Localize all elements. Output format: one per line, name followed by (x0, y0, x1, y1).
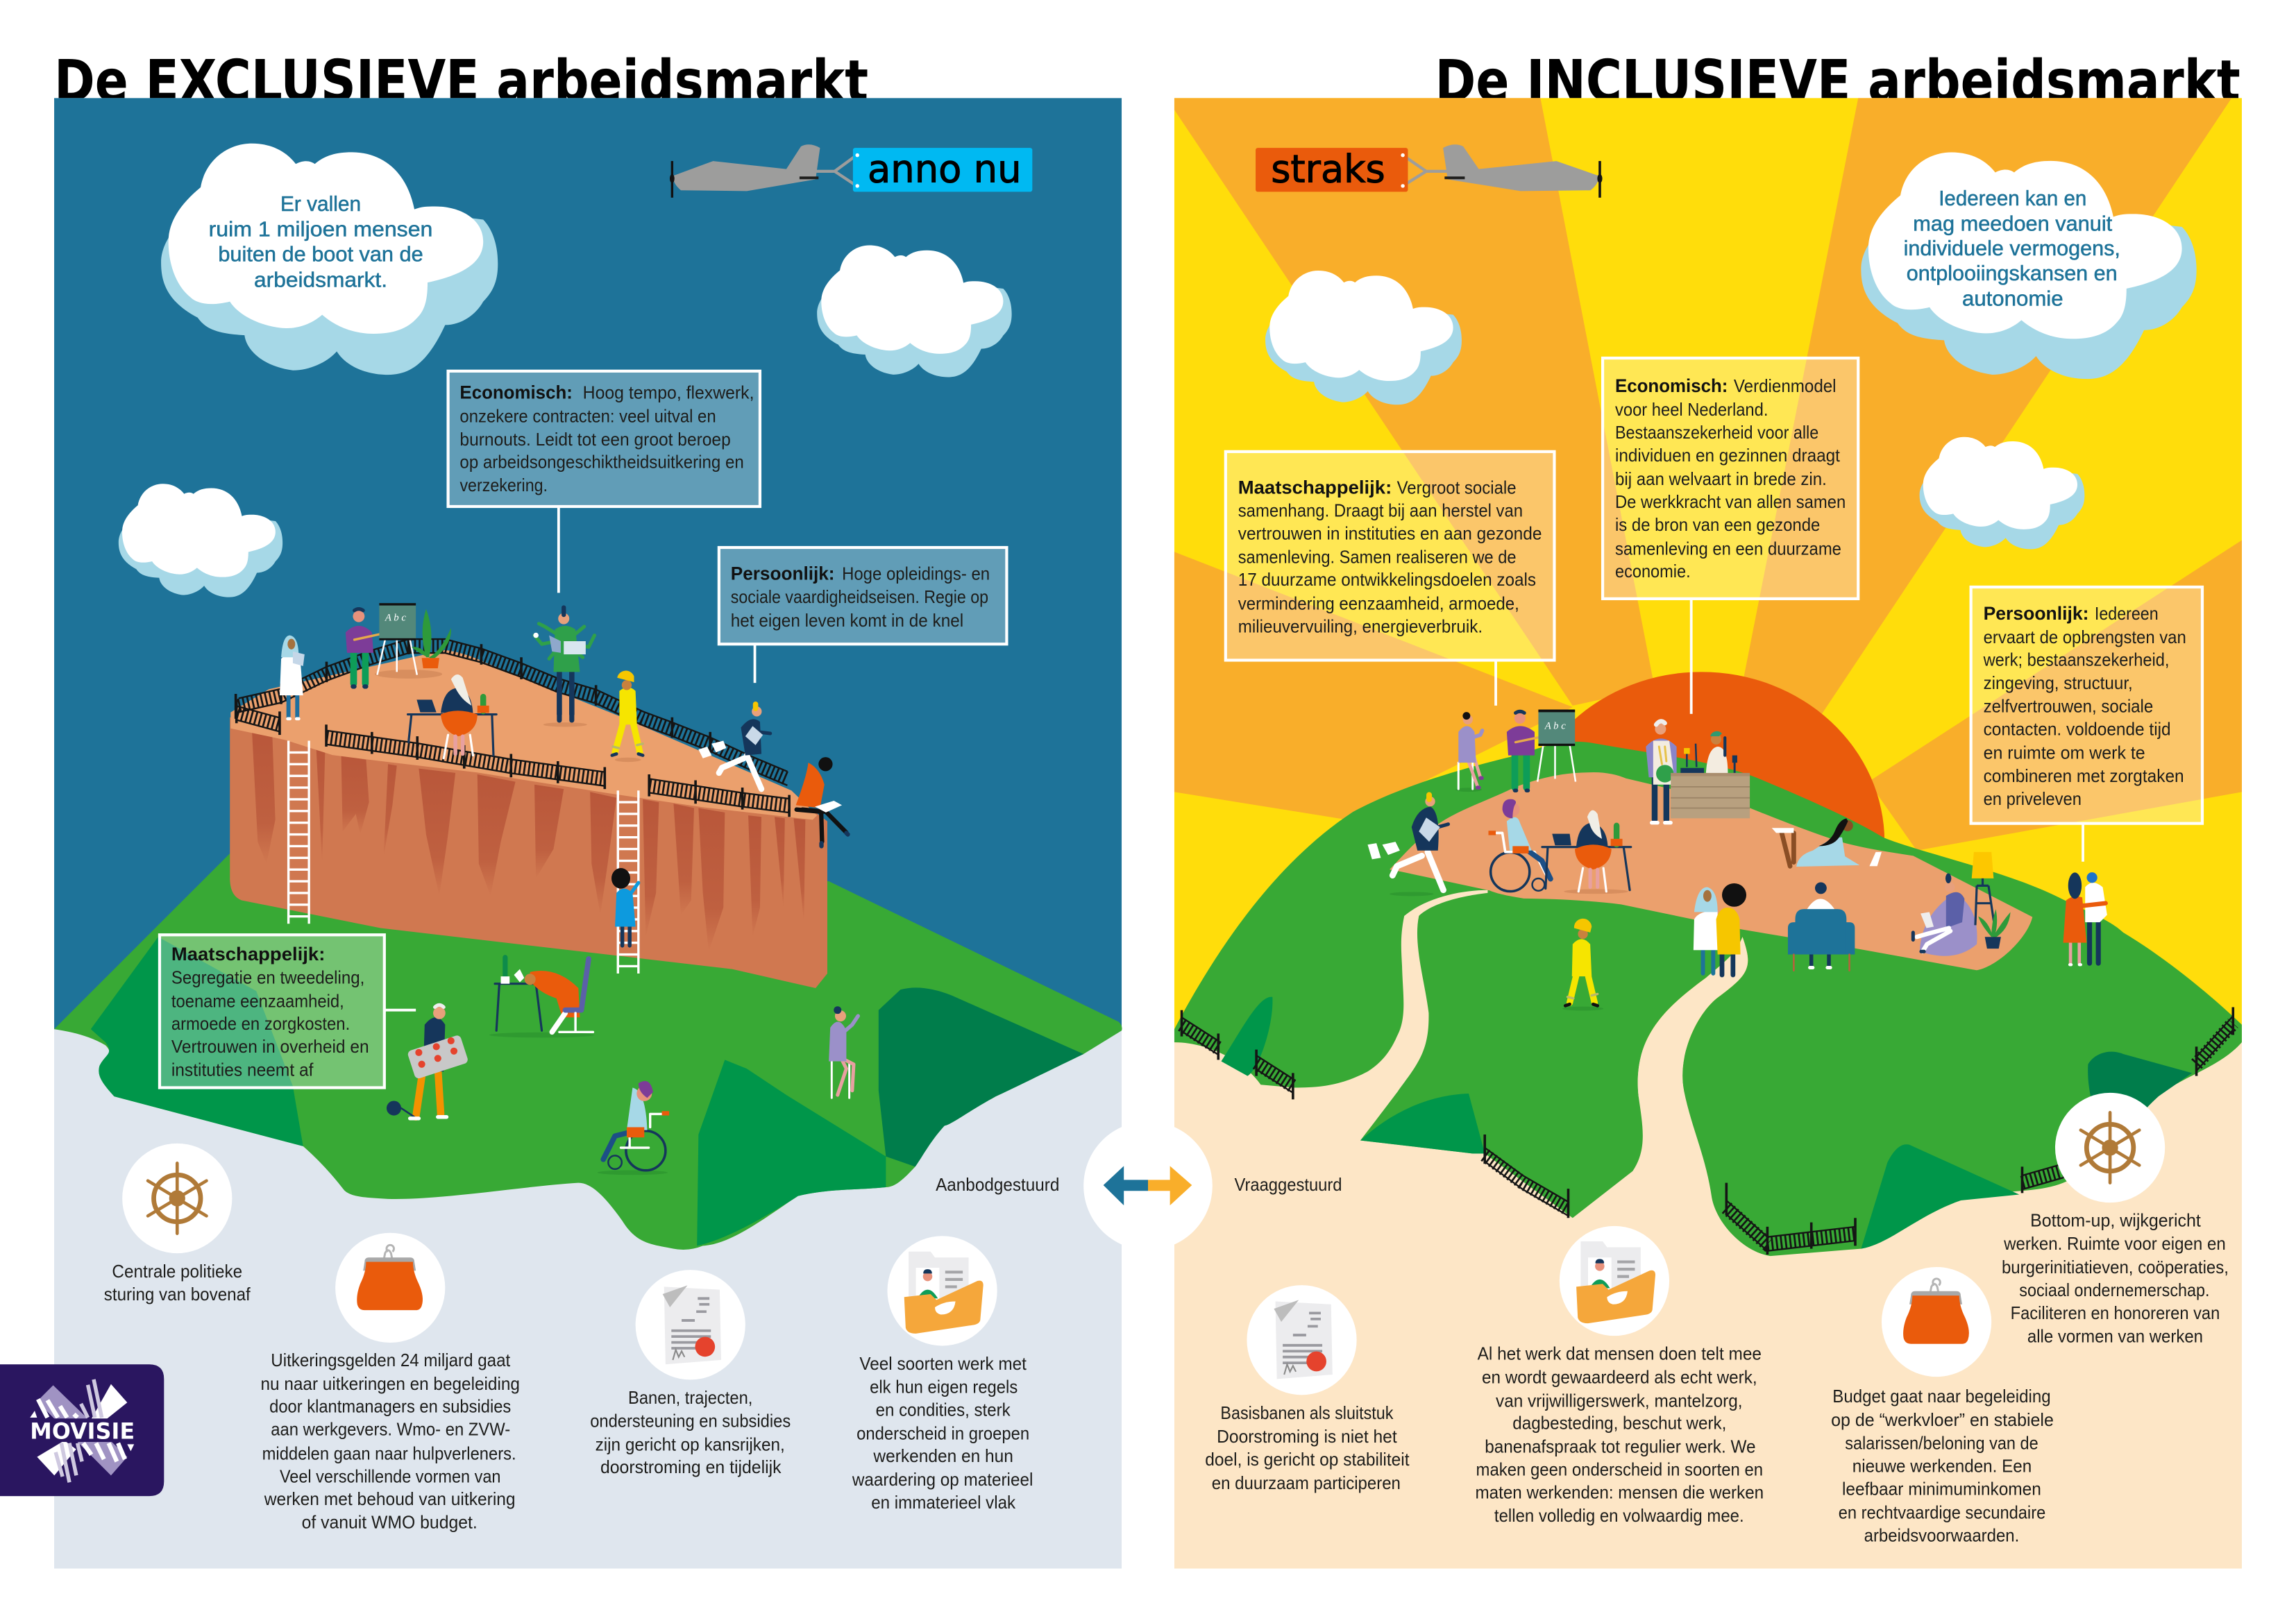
item: folder with text: maken geen onderscheid in soorten en (1476, 1461, 1763, 1480)
item: purse with text: aan werkgevers. Wmo- en ZVW- (271, 1420, 510, 1439)
label: Aanbodgestuurd: Aanbodgestuurd (936, 1175, 1059, 1195)
callout: Persoonlijk (exclusive) (719, 547, 1006, 683)
callout: Economisch (exclusive): Economisch: (459, 382, 573, 403)
person: man with apron (1646, 721, 1677, 823)
plaza surface (1390, 772, 2032, 970)
item: document with text (1205, 1285, 1410, 1493)
land shading: centre (697, 1060, 886, 1246)
item: ship wheel with text: burgerinitiatieven, coöperaties, (2002, 1258, 2229, 1277)
callout: Economisch (inclusive): samenleving en een duurzame (1615, 540, 1841, 559)
callout: Maatschappelijk (inclusive): vermindering eenzaamheid, armoede, (1238, 594, 1519, 613)
sun rays (1174, 98, 2242, 851)
item: purse with text: arbeidsvoorwaarden. (1864, 1526, 2019, 1545)
cliff face (230, 717, 827, 988)
green land (54, 849, 1122, 1250)
person: yellow construction worker (612, 671, 643, 762)
callout: Persoonlijk (inclusive): contacten. voldoende tijd (1984, 720, 2171, 739)
callout: Economisch (exclusive): burnouts. Leidt tot een groot beroep (459, 430, 731, 450)
person: collapsed at desk (489, 958, 595, 1037)
callout: Persoonlijk (inclusive): combineren met zorgtaken (1984, 767, 2184, 786)
callout: Maatschappelijk (exclusive): Maatschappelijk: (171, 944, 325, 965)
callout: Maatschappelijk (exclusive): Vertrouwen in overheid en (171, 1037, 369, 1057)
item: purse with text: of vanuit WMO budget. (302, 1513, 478, 1533)
callout: Persoonlijk (inclusive): zingeving, structuur, (1984, 674, 2133, 693)
callout: Maatschappelijk (inclusive): 17 duurzame ontwikkelingsdoelen zoals (1238, 570, 1536, 590)
green hill (1174, 742, 2242, 1256)
person at desk on plaza (1542, 810, 1631, 894)
item: purse with text (261, 1233, 520, 1533)
front fence (237, 699, 789, 817)
item: document with text (590, 1270, 791, 1477)
cloud: top right with message: individuele vermogens, (1904, 237, 2120, 260)
plant in dark pot (1978, 909, 2011, 949)
flipchart (1537, 710, 1576, 782)
item: document with text: doorstroming en tijdelijk (600, 1458, 782, 1477)
person: sitting on cliff edge reading (796, 757, 848, 846)
item: folder with text: onderscheid in groepen (856, 1424, 1029, 1443)
person: hijab woman (1694, 887, 1718, 974)
airplane with banner: straks: straks (1271, 147, 1385, 192)
callout: Persoonlijk (exclusive): het eigen leven komt in de knel (731, 611, 963, 631)
callout: Persoonlijk (inclusive) (1971, 587, 2202, 862)
cloud: top right (817, 246, 1012, 377)
callout: Persoonlijk (inclusive): ervaart de opbrengsten van (1984, 628, 2186, 647)
callout: Economisch (inclusive): bij aan welvaart in brede zin. (1615, 470, 1827, 489)
callout: Maatschappelijk (inclusive): Vergroot sociale (1397, 479, 1517, 498)
cloud: small left (119, 484, 282, 597)
cloud with message: left (161, 144, 498, 375)
person: wheelchair user (598, 1081, 669, 1175)
market stall with vendor (1671, 731, 1750, 818)
panel: exclusive labour market (54, 98, 1122, 1569)
item: ship wheel with text: sturing van bovenaf (104, 1285, 251, 1305)
item: purse with text (1831, 1267, 2054, 1545)
item: ship wheel with text: Faciliteren en honoreren van (2011, 1304, 2220, 1323)
item: folder with text: Al het werk dat mensen doen telt mee (1478, 1344, 1762, 1363)
callout: Maatschappelijk (exclusive): instituties neemt af (171, 1061, 314, 1080)
callout: Maatschappelijk (inclusive): samenhang. Draagt bij aan herstel van (1238, 502, 1523, 521)
item: folder with text: en immaterieel vlak (871, 1493, 1015, 1513)
callout: Economisch (inclusive): De werkkracht van allen samen (1615, 493, 1846, 512)
logo: Movisie (0, 1364, 164, 1496)
item: folder with text: werkenden en hun (872, 1447, 1013, 1466)
winding path: left (1294, 890, 1487, 1140)
item: folder with text: tellen volledig en volwaardig mee. (1494, 1506, 1744, 1526)
panel: inclusive labour market (1174, 98, 2242, 1569)
cloud: top right with message (1861, 152, 2197, 379)
person: woman on stool with phone (1455, 712, 1483, 792)
item: purse with text: werken met behoud van uitkering (264, 1490, 516, 1509)
item: ship wheel with text: alle vormen van werken (2027, 1327, 2203, 1346)
cloud: top right with message: ontplooiingskansen en (1907, 262, 2118, 285)
cloud with message: left: Er vallen (280, 192, 361, 216)
land shading: hill patches (1221, 997, 2192, 1249)
callout: Persoonlijk (inclusive): Persoonlijk: (1984, 603, 2088, 624)
item: purse with text: Uitkeringsgelden 24 miljard gaat (271, 1351, 510, 1370)
item: document with text: Basisbanen als sluitstuk (1220, 1404, 1393, 1423)
callout: Persoonlijk (exclusive): Hoge opleidings- en (842, 564, 990, 584)
item: purse with text: door klantmanagers en subsidies (269, 1397, 511, 1417)
item: document with text: doel, is gericht op stabiliteit (1205, 1450, 1410, 1470)
winding path: right (1638, 937, 1748, 1096)
item: folder with text: maten werkenden: mensen die werken (1476, 1483, 1764, 1502)
item: ship wheel with text: werken. Ruimte voor eigen en (2003, 1234, 2226, 1254)
cliff plateau (230, 634, 827, 988)
item: document with text: zijn gericht op kansrijken, (596, 1435, 785, 1454)
item: ship wheel with text: Centrale politieke (112, 1262, 242, 1282)
callout: Maatschappelijk (inclusive): vertrouwen in instituties en aan gezonde (1238, 525, 1542, 544)
title: exclusive: De EXCLUSIEVE arbeidsmarkt (54, 48, 868, 115)
callout: Economisch (inclusive): individuen en gezinnen draagt (1615, 446, 1840, 466)
person: yellow construction worker walking (1562, 919, 1603, 1011)
item: purse with text: nieuwe werkenden. Een (1852, 1457, 2032, 1477)
callout: Economisch (exclusive): op arbeidsongeschiktheidsuitkering en (459, 452, 744, 472)
callout: Maatschappelijk (exclusive): Segregatie en tweedeling, (171, 969, 364, 988)
person: teacher at flipchart (1507, 711, 1551, 790)
person: hijab woman with tablet (280, 636, 305, 719)
person: carrying pill strip with ball and chain (387, 1005, 469, 1119)
item: folder with text: banenafspraak tot regulier werk. We (1485, 1438, 1756, 1457)
person: teacher at flipchart (346, 609, 442, 686)
cloud: top right with message: autonomie (1962, 287, 2063, 310)
callout: Economisch (inclusive): Verdienmodel (1734, 377, 1837, 396)
person: wheelchair user (1489, 799, 1551, 892)
item: folder with text: waardering op materieel (852, 1470, 1033, 1490)
label: Vraaggestuurd: Vraaggestuurd (1234, 1175, 1342, 1195)
flipchart (377, 603, 417, 675)
plant in orange pot (412, 609, 451, 668)
cloud: small right (1920, 437, 2084, 549)
flipchart: A b c (385, 613, 406, 624)
callout: Economisch (exclusive): Hoog tempo, flexwerk, (583, 384, 754, 403)
ladder: right (618, 790, 639, 974)
callout: Persoonlijk (exclusive): Persoonlijk: (731, 563, 835, 584)
person: woman on stool with phone (829, 1006, 858, 1098)
item: ship wheel with text: Bottom-up, wijkgericht (2030, 1212, 2201, 1231)
callout: Economisch (inclusive) (1603, 358, 1858, 714)
item: purse with text: op de “werkvloer” en stabiele (1831, 1411, 2054, 1430)
airplane with banner: anno nu: anno nu (868, 147, 1022, 192)
callout: Maatschappelijk (inclusive) (1226, 452, 1554, 706)
person in blue armchair (1788, 883, 1855, 971)
callout: Economisch (inclusive): Economisch: (1615, 375, 1728, 396)
callout: Maatschappelijk (inclusive): milieuvervuiling, energieverbruik. (1238, 617, 1483, 636)
item: folder with text: dagbesteding, beschut werk, (1512, 1414, 1726, 1434)
land shading: right (879, 987, 1083, 1166)
person: running with laptop (698, 704, 770, 789)
callout: Persoonlijk (inclusive): en priveleven (1984, 790, 2082, 809)
cloud with message: left: ruim 1 miljoen mensen (209, 218, 432, 241)
callout: Persoonlijk (exclusive): sociale vaardigheidseisen. Regie op (731, 588, 988, 607)
callout: Maatschappelijk (inclusive): Maatschappelijk: (1238, 477, 1392, 498)
callout: Persoonlijk (inclusive): en ruimte om werk te (1984, 744, 2145, 763)
cloud: top right with message: Iedereen kan en (1939, 187, 2086, 210)
callout: Maatschappelijk (exclusive): armoede en zorgkosten. (171, 1014, 350, 1034)
plateau top surface (230, 650, 817, 819)
fences on hill edge (1182, 1007, 2233, 1255)
airplane with banner: straks (1256, 144, 1603, 198)
ladder: left (289, 741, 309, 924)
couple embracing (2063, 872, 2107, 965)
person: runner with laptop (1367, 795, 1448, 896)
item: folder with text (1476, 1226, 1764, 1526)
centre double arrow in white circle (1083, 1121, 1213, 1250)
callout: Economisch (exclusive): onzekere contracten: veel uitval en (459, 407, 716, 426)
item: folder with text: van vrijwilligerswerk, mantelzorg, (1496, 1391, 1743, 1411)
sun (1519, 672, 1884, 878)
logo: Movisie: MOVISIE (30, 1419, 135, 1444)
callout: Persoonlijk (inclusive): zelfvertrouwen, sociale (1984, 697, 2153, 716)
floor lamp (1972, 852, 1994, 925)
item: folder with text (852, 1236, 1033, 1513)
item: purse with text: Veel verschillende vormen van (280, 1467, 501, 1486)
item: document with text: ondersteuning en subsidies (590, 1411, 791, 1431)
callout: Maatschappelijk (exclusive) (160, 935, 416, 1088)
cloud: top right with message: mag meedoen vanuit (1913, 212, 2113, 235)
person: multitasking woman (533, 608, 595, 726)
cloud: left (1265, 271, 1462, 405)
cloud with message: left: arbeidsmarkt. (254, 269, 387, 292)
person on beanbag with laptop (1913, 874, 1977, 956)
item: ship wheel with text: sociaal ondernemerschap. (2019, 1281, 2210, 1300)
person: woman in yellow coat (1716, 883, 1746, 975)
item: purse with text: en rechtvaardige secundaire (1839, 1503, 2045, 1522)
item: folder with text: elk hun eigen regels (870, 1377, 1018, 1397)
item: folder with text: Veel soorten werk met (859, 1354, 1027, 1374)
flipchart: A b c (1544, 721, 1566, 732)
callout: Economisch (inclusive): Bestaanszekerheid voor alle (1615, 423, 1818, 443)
item: purse with text: leefbaar minimuminkomen (1842, 1480, 2041, 1499)
back fence (236, 634, 787, 785)
callout: Maatschappelijk (inclusive): samenleving. Samen realiseren we de (1238, 548, 1517, 568)
callout: Economisch (inclusive): is de bron van een gezonde (1615, 516, 1820, 535)
item: document with text: en duurzaam participeren (1212, 1474, 1401, 1493)
item: folder with text: en condities, sterk (876, 1400, 1011, 1420)
item: purse with text: salarissen/beloning van de (1845, 1434, 2038, 1454)
cloud with message: left: buiten de boot van de (218, 243, 423, 266)
item: purse with text: Budget gaat naar begeleiding (1832, 1387, 2051, 1407)
item: ship wheel with text (104, 1144, 251, 1305)
item: document with text: Doorstroming is niet het (1217, 1427, 1397, 1447)
callout: Economisch (inclusive): voor heel Nederland. (1615, 400, 1768, 420)
item: ship wheel with text (2002, 1093, 2229, 1346)
person: climbing ladder (611, 868, 639, 946)
callout: Economisch (inclusive): economie. (1615, 562, 1691, 581)
callout: Economisch (exclusive) (448, 371, 760, 593)
person: woman lying on stomach with laptop (1772, 818, 1882, 867)
callout: Persoonlijk (inclusive): Iedereen (2095, 604, 2159, 624)
item: purse with text: middelen gaan naar hulpverleners. (262, 1444, 516, 1463)
land shading: left (91, 937, 303, 1146)
person at desk on plateau (408, 674, 496, 758)
item: document with text: Banen, trajecten, (628, 1388, 752, 1408)
item: purse with text: nu naar uitkeringen en begeleiding (261, 1375, 520, 1394)
airplane with banner: anno nu (670, 144, 1032, 198)
callout: Economisch (exclusive): verzekering. (459, 476, 548, 495)
callout: Maatschappelijk (exclusive): toename eenzaamheid, (171, 992, 344, 1011)
item: folder with text: en wordt gewaardeerd als echt werk, (1482, 1368, 1757, 1387)
callout: Persoonlijk (inclusive): werk; bestaanszekerheid, (1983, 650, 2170, 670)
